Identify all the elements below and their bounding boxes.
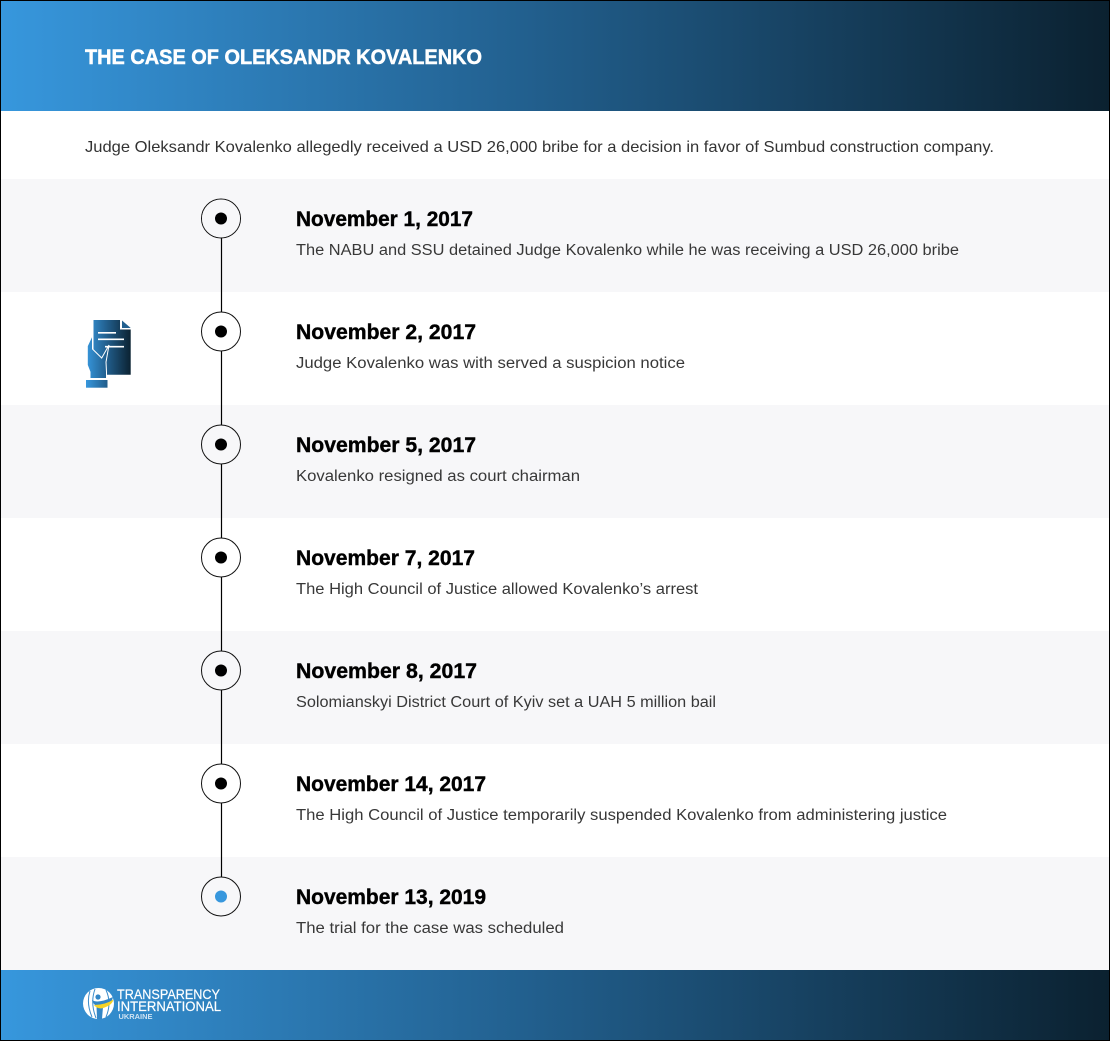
title: THE CASE OF OLEKSANDR KOVALENKO (85, 46, 482, 69)
event: November 2, 2017 (202, 312, 685, 372)
event: November 5, 2017: Kovalenko resigned as court chairman (296, 468, 580, 485)
event: November 7, 2017 (202, 538, 699, 598)
event: November 5, 2017: November 5, 2017 (296, 434, 476, 457)
event: November 2, 2017: Judge Kovalenko was with served a suspicion notice (296, 355, 685, 372)
footer banner (1, 970, 1109, 1040)
event: November 8, 2017: Solomianskyi District Court of Kyiv set a UAH 5 million bail (296, 694, 716, 711)
logo: Transparency International Ukraine: TRANSPARENCY (117, 987, 220, 1002)
logo: Transparency International Ukraine: UKRAINE (118, 1014, 153, 1021)
timeline axis (220, 218, 222, 897)
event: November 1, 2017 (202, 199, 959, 259)
intro text: Judge Oleksandr Kovalenko allegedly received a USD 26,000 bribe for a decision in favor of Sumbud construction company. (85, 139, 994, 156)
icon: hand holding document (86, 320, 131, 388)
event: November 14, 2017 (202, 764, 947, 824)
event: November 1, 2017: The NABU and SSU detained Judge Kovalenko while he was receiving a USD 26,000 bribe (296, 242, 959, 259)
header banner (1, 1, 1109, 111)
event: November 13, 2019 (202, 877, 564, 937)
row backgrounds (1, 179, 1109, 970)
event: November 2, 2017: November 2, 2017 (296, 321, 476, 344)
event: November 5, 2017 (202, 425, 580, 485)
event: November 8, 2017 (202, 651, 716, 711)
logo: Transparency International Ukraine (83, 987, 221, 1021)
event: November 14, 2017: The High Council of Justice temporarily suspended Kovalenko from administering justice (296, 807, 947, 824)
event: November 13, 2019: The trial for the case was scheduled (296, 920, 564, 937)
event: November 13, 2019: November 13, 2019 (296, 886, 486, 909)
event: November 14, 2017: November 14, 2017 (296, 773, 486, 796)
event: November 1, 2017: November 1, 2017 (296, 208, 473, 231)
event: November 7, 2017: November 7, 2017 (296, 547, 475, 570)
event: November 7, 2017: The High Council of Justice allowed Kovalenko’s arrest (296, 581, 699, 598)
logo: Transparency International Ukraine: INTERNATIONAL (117, 999, 221, 1014)
event: November 8, 2017: November 8, 2017 (296, 660, 477, 683)
